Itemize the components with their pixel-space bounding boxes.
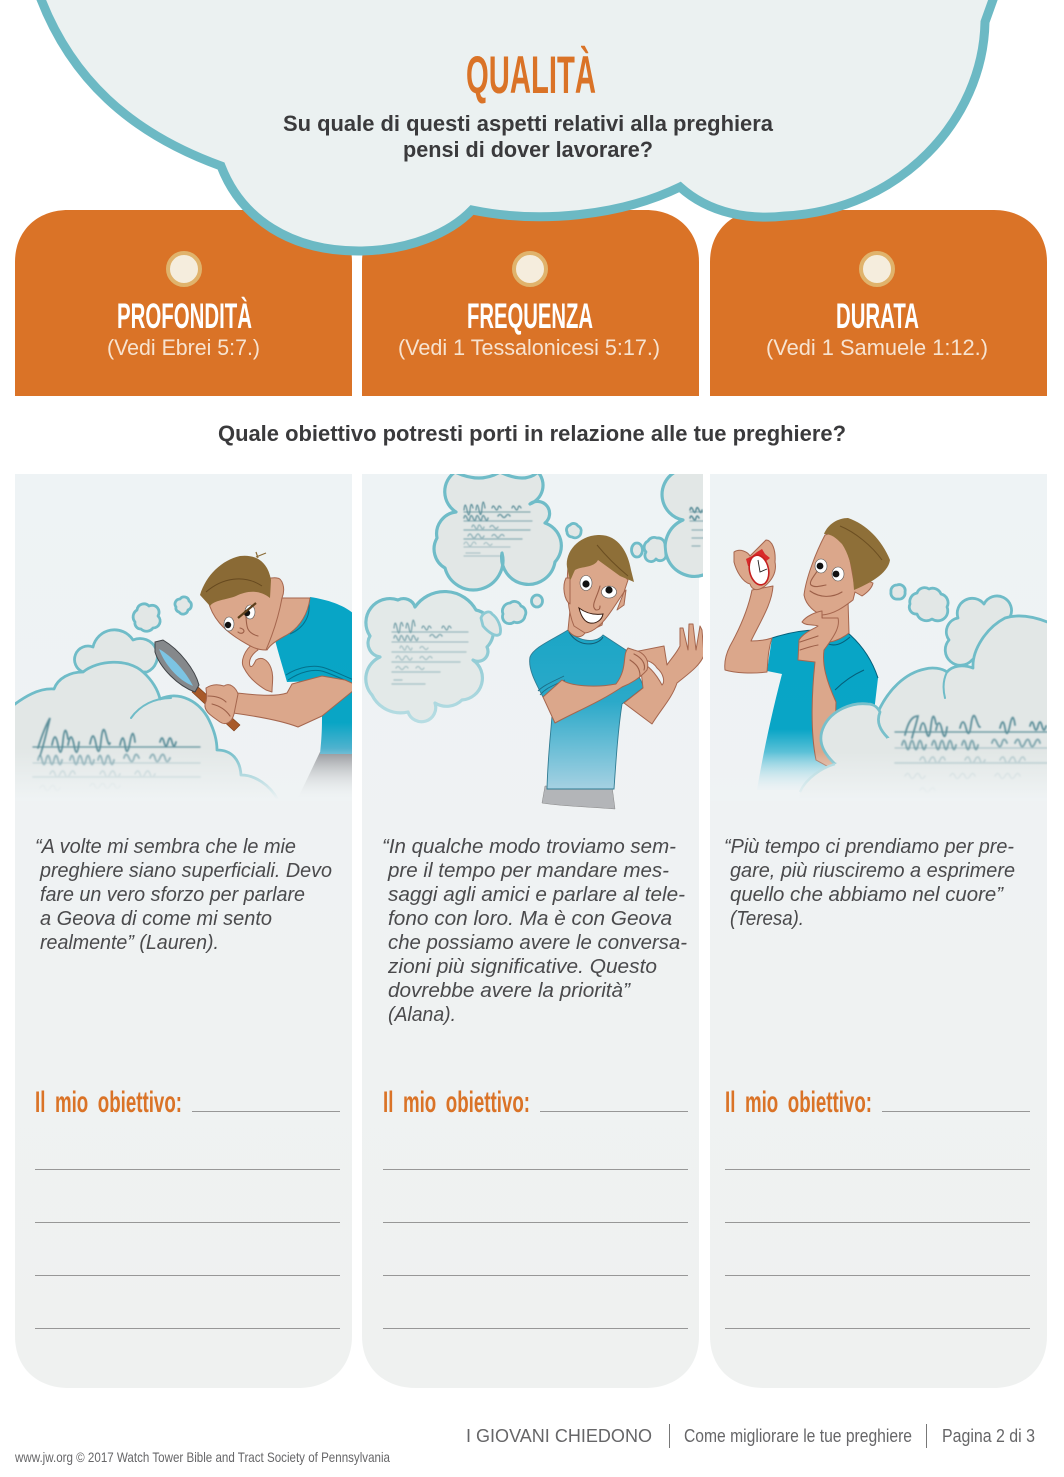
quote: Lauren: a Geova di come mi sento [40, 908, 272, 930]
thought puffs [133, 597, 191, 631]
heading: frequenza: FREQUENZA [467, 297, 593, 336]
scribbled writing [895, 716, 1047, 792]
smile [579, 608, 603, 623]
quote: Alana: dovrebbe avere la priorità” [388, 980, 631, 1002]
panel: durata goal [710, 474, 1052, 1388]
series name: I GIOVANI CHIEDONO [466, 1426, 652, 1446]
right thought cloud [660, 474, 703, 578]
shirt [530, 630, 644, 789]
magnifying glass [155, 640, 240, 731]
stopwatch [746, 549, 771, 587]
shirt [757, 630, 878, 790]
quote: Lauren [35, 836, 332, 954]
illustration: boy with magnifying glass [15, 552, 352, 796]
scribbled writing [32, 716, 202, 778]
quote: Alana: zioni più significative. Questo [387, 956, 657, 978]
question: Su quale di questi aspetti relativi alla preghiera [283, 111, 774, 136]
big cloud [800, 616, 1052, 830]
raised arm [725, 586, 773, 673]
illustration: boy counting on fingers [366, 472, 712, 809]
hair [567, 535, 634, 582]
reference: Ebrei: (Vedi Ebrei 5:7.) [107, 335, 260, 360]
article title: Come migliorare le tue preghiere [684, 1426, 912, 1446]
pin: frequenza [514, 253, 546, 285]
quote: Lauren: preghiere siano superficiali. Devo [39, 860, 332, 882]
header thought cloud [39, 0, 995, 251]
pin: profondità [168, 253, 200, 285]
pin: durata [861, 253, 893, 285]
quote: Teresa [724, 836, 1015, 930]
reference: Tessalonicesi: (Vedi 1 Tessalonicesi 5:17.) [398, 335, 660, 360]
back cloud [75, 630, 157, 672]
goal writing lines [35, 1112, 340, 1328]
goal writing lines [725, 1112, 1030, 1328]
quote: Alana: fono con loro. Ma è con Geova [388, 908, 672, 930]
quote: Alana: pre il tempo per mandare mes- [387, 860, 669, 882]
quote: Lauren: fare un vero sforzo per parlare [40, 884, 305, 906]
heading: profondità: PROFONDITÀ [117, 296, 252, 336]
neck [266, 598, 310, 650]
quote: Lauren: “A volte mi sembra che le mie [35, 836, 296, 858]
eyes [815, 559, 844, 581]
hair [200, 556, 271, 606]
pants [542, 786, 615, 809]
panel: profondità goal [5, 474, 354, 1388]
goal writing lines [383, 1112, 688, 1328]
quote: Teresa: (Teresa). [730, 908, 804, 930]
fade [15, 748, 352, 802]
top thought cloud [434, 472, 561, 590]
hair [824, 518, 890, 590]
stopwatch hand [734, 540, 775, 590]
fade [710, 752, 1047, 802]
front cloud [821, 704, 888, 766]
quote: Alana [382, 836, 687, 1026]
quote: Alana: che possiamo avere le conversa- [388, 932, 687, 954]
question [283, 111, 774, 162]
pants [304, 752, 352, 786]
quote: Teresa: gare, più riusciremo a esprimere [730, 860, 1015, 882]
thought puffs [481, 523, 666, 635]
quote: Teresa: “Più tempo ci prendiamo per pre- [724, 836, 1014, 858]
head [804, 530, 873, 615]
quote: Teresa: quello che abbiamo nel cuore” [730, 884, 1004, 906]
goal heading: Il mio obiettivo: [383, 1086, 530, 1119]
subheading: Quale obiettivo potresti porti in relazione alle tue preghiere? [218, 421, 846, 446]
left arm and hand [543, 648, 648, 723]
shirt [275, 597, 354, 754]
orange panel: frequenza [362, 210, 699, 396]
back cloud [945, 596, 1012, 665]
page number: Pagina 2 di 3 [942, 1426, 1035, 1446]
eyes [224, 605, 255, 631]
neck [568, 610, 605, 637]
neck [822, 600, 849, 642]
goal heading: Il mio obiettivo: [725, 1086, 872, 1119]
orange panel: durata [710, 210, 1047, 396]
question: pensi di dover lavorare? [403, 137, 653, 162]
quote: Alana: (Alana). [388, 1004, 456, 1026]
left thought cloud [366, 592, 493, 722]
panel: frequenza goal [362, 472, 712, 1388]
illustration: boy with stopwatch [724, 518, 1047, 792]
front cloud [15, 660, 277, 796]
copyright: www.jw.org © 2017 Watch Tower Bible and Tract Society of Pennsylvania [14, 1449, 390, 1465]
title: QUALITÀ [466, 45, 596, 105]
head [208, 578, 284, 650]
arm [233, 676, 354, 727]
eyes [580, 576, 616, 598]
supporting finger and fist [242, 643, 273, 692]
quote: Lauren: realmente” (Lauren). [40, 932, 219, 954]
gripping hand [205, 685, 238, 724]
goal heading: Il mio obiettivo: [35, 1086, 182, 1119]
reference: Samuele: (Vedi 1 Samuele 1:12.) [766, 335, 988, 360]
thought puffs [891, 585, 948, 621]
orange panel: profondità [15, 210, 352, 396]
quote: Alana: saggi agli amici e parlare al tele- [388, 884, 685, 906]
heading: durata: DURATA [836, 297, 919, 336]
head [566, 560, 628, 634]
footer [14, 1424, 1035, 1465]
quote: Alana: “In qualche modo troviamo sem- [382, 836, 676, 858]
chin hand and forearm [798, 611, 838, 770]
right arm and open hand [624, 624, 704, 724]
